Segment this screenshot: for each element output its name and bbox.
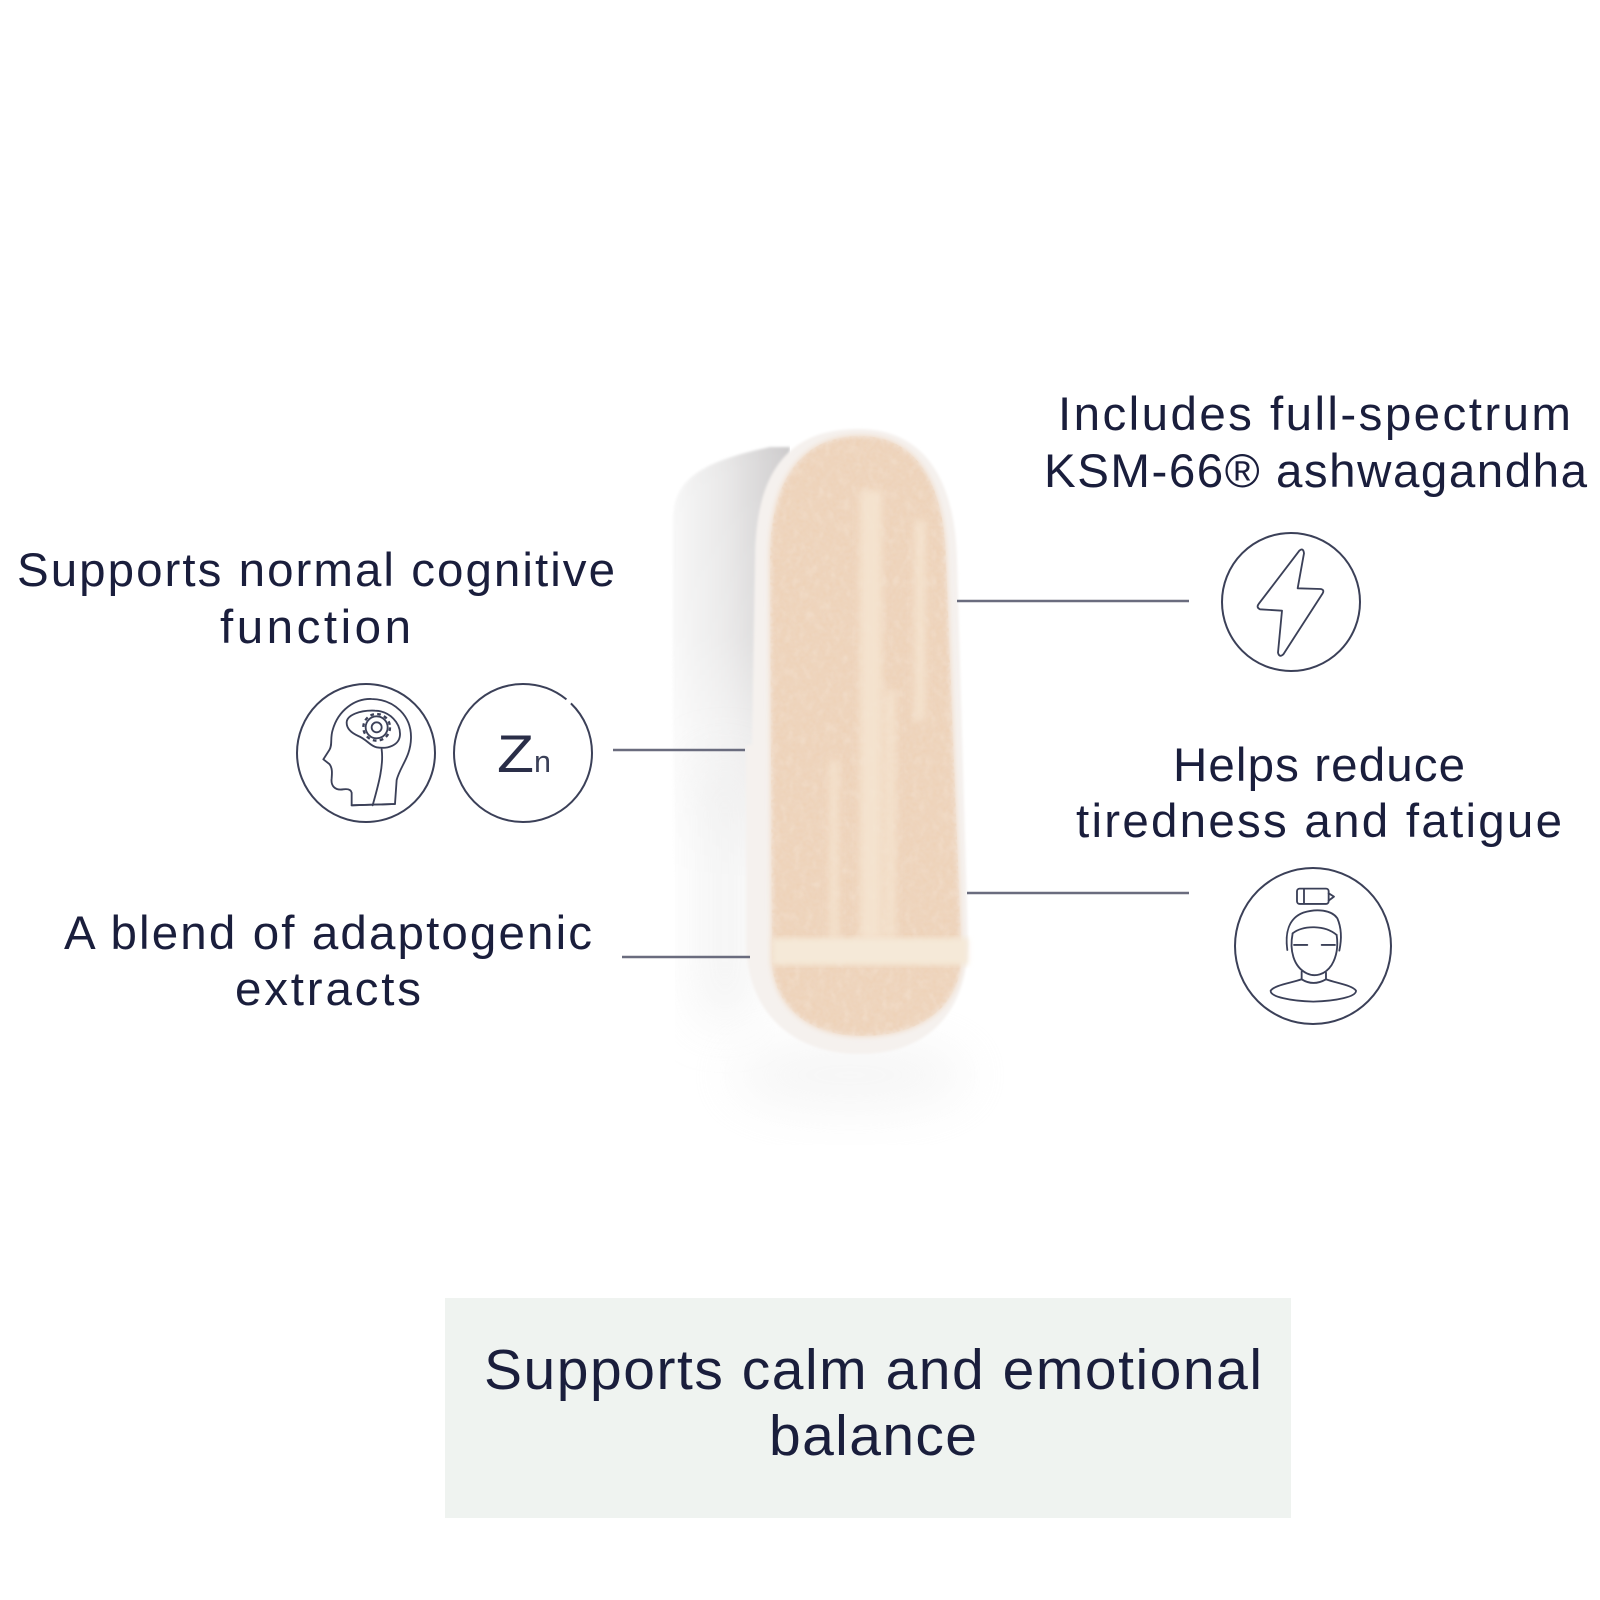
callout: cognitive function: function xyxy=(220,601,411,654)
capsule powder xyxy=(770,436,961,1036)
capsule xyxy=(746,429,970,1054)
callout: full-spectrum ashwagandha xyxy=(1044,388,1588,498)
callout: full-spectrum ashwagandha: KSM-66® ashwagandha xyxy=(1044,445,1588,498)
capsule grain xyxy=(770,436,960,1036)
leader line: fatigue xyxy=(967,892,1189,894)
callout: cognitive function xyxy=(17,544,615,654)
capsule cast shadow xyxy=(673,447,970,1110)
icon: lightning bolt xyxy=(1222,533,1360,671)
capsule light streaks xyxy=(830,490,925,940)
icon: tired face with low battery xyxy=(1235,868,1391,1024)
callout: adaptogenic extracts: extracts xyxy=(235,963,421,1016)
heading: calm and emotional balance xyxy=(484,1338,1262,1468)
callout: tiredness and fatigue: tiredness and fatigue xyxy=(1076,795,1562,848)
callout: full-spectrum ashwagandha: Includes full-spectrum xyxy=(1058,388,1571,441)
icon: head with brain and gear xyxy=(297,684,435,822)
leader line: zinc xyxy=(613,749,745,751)
callout: tiredness and fatigue: Helps reduce xyxy=(1173,739,1465,792)
callout: tiredness and fatigue xyxy=(1076,739,1562,848)
callout: cognitive function: Supports normal cognitive xyxy=(17,544,615,597)
callout: adaptogenic extracts xyxy=(64,907,592,1016)
heading: calm and emotional balance: Supports calm and emotional xyxy=(484,1338,1262,1402)
icon: zinc symbol: n xyxy=(534,744,551,779)
capsule shell xyxy=(746,429,968,1054)
leader line: ashwagandha xyxy=(957,600,1189,602)
icon: zinc symbol: Z xyxy=(497,725,534,784)
leader line: adaptogenic xyxy=(622,956,750,958)
callout: adaptogenic extracts: A blend of adaptogenic xyxy=(64,907,592,960)
capsule band xyxy=(772,938,968,965)
icon: zinc symbol xyxy=(454,684,592,822)
heading: calm and emotional balance: balance xyxy=(769,1404,977,1468)
panel: calm and emotional balance xyxy=(445,1298,1291,1518)
